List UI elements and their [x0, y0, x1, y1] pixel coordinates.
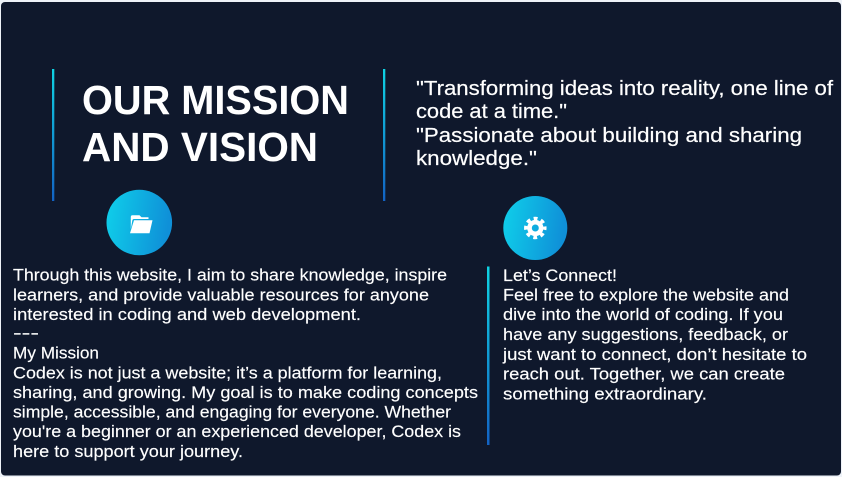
text block: mission: Through this website, I aim to share knowledge, inspire [13, 266, 447, 284]
title: AND VISION [82, 124, 318, 170]
quote text: "Passionate about building and sharing [416, 124, 802, 147]
text block: mission: sharing, and growing. My goal is to make coding concepts [13, 383, 478, 402]
right column accent bar [487, 266, 490, 445]
quote text [416, 77, 833, 170]
text block: let's connect: Let’s Connect! [503, 266, 617, 285]
quote text: code at a time." [416, 100, 567, 123]
title left accent bar [52, 69, 54, 201]
text block: let's connect: Feel free to explore the website and [503, 286, 789, 304]
text block: let's connect: something extraordinary. [503, 384, 707, 404]
text block: mission: you're a beginner or an experienced developer, Codex is [13, 422, 461, 441]
text block: mission: Codex is not just a website; it’s a platform for learning, [13, 364, 442, 382]
quote text: knowledge." [416, 147, 537, 170]
text block: mission: My Mission [13, 344, 99, 362]
title right accent bar [383, 69, 385, 201]
text block: mission: simple, accessible, and engaging for everyone. Whether [13, 402, 451, 422]
text block: let's connect [502, 266, 807, 404]
text block: let's connect: have any suggestions, feedback, or [503, 325, 788, 344]
text block: mission: interested in coding and web development. [13, 305, 361, 324]
quote text: "Transforming ideas into reality, one line of [416, 77, 833, 100]
icon: folder [106, 190, 172, 255]
title: OUR MISSION [82, 77, 349, 123]
text block: mission: learners, and provide valuable resources for anyone [13, 286, 429, 304]
icon: gear [503, 196, 567, 260]
text block: mission: --- [13, 324, 39, 342]
text block: let's connect: reach out. Together, we can create [503, 364, 785, 384]
text block: let's connect: dive into the world of coding. If you [503, 305, 783, 324]
text block: mission [13, 266, 478, 461]
text block: mission: here to support your journey. [13, 442, 243, 461]
text block: let's connect: just want to connect, don’t hesitate to [502, 345, 807, 364]
title [82, 77, 349, 170]
